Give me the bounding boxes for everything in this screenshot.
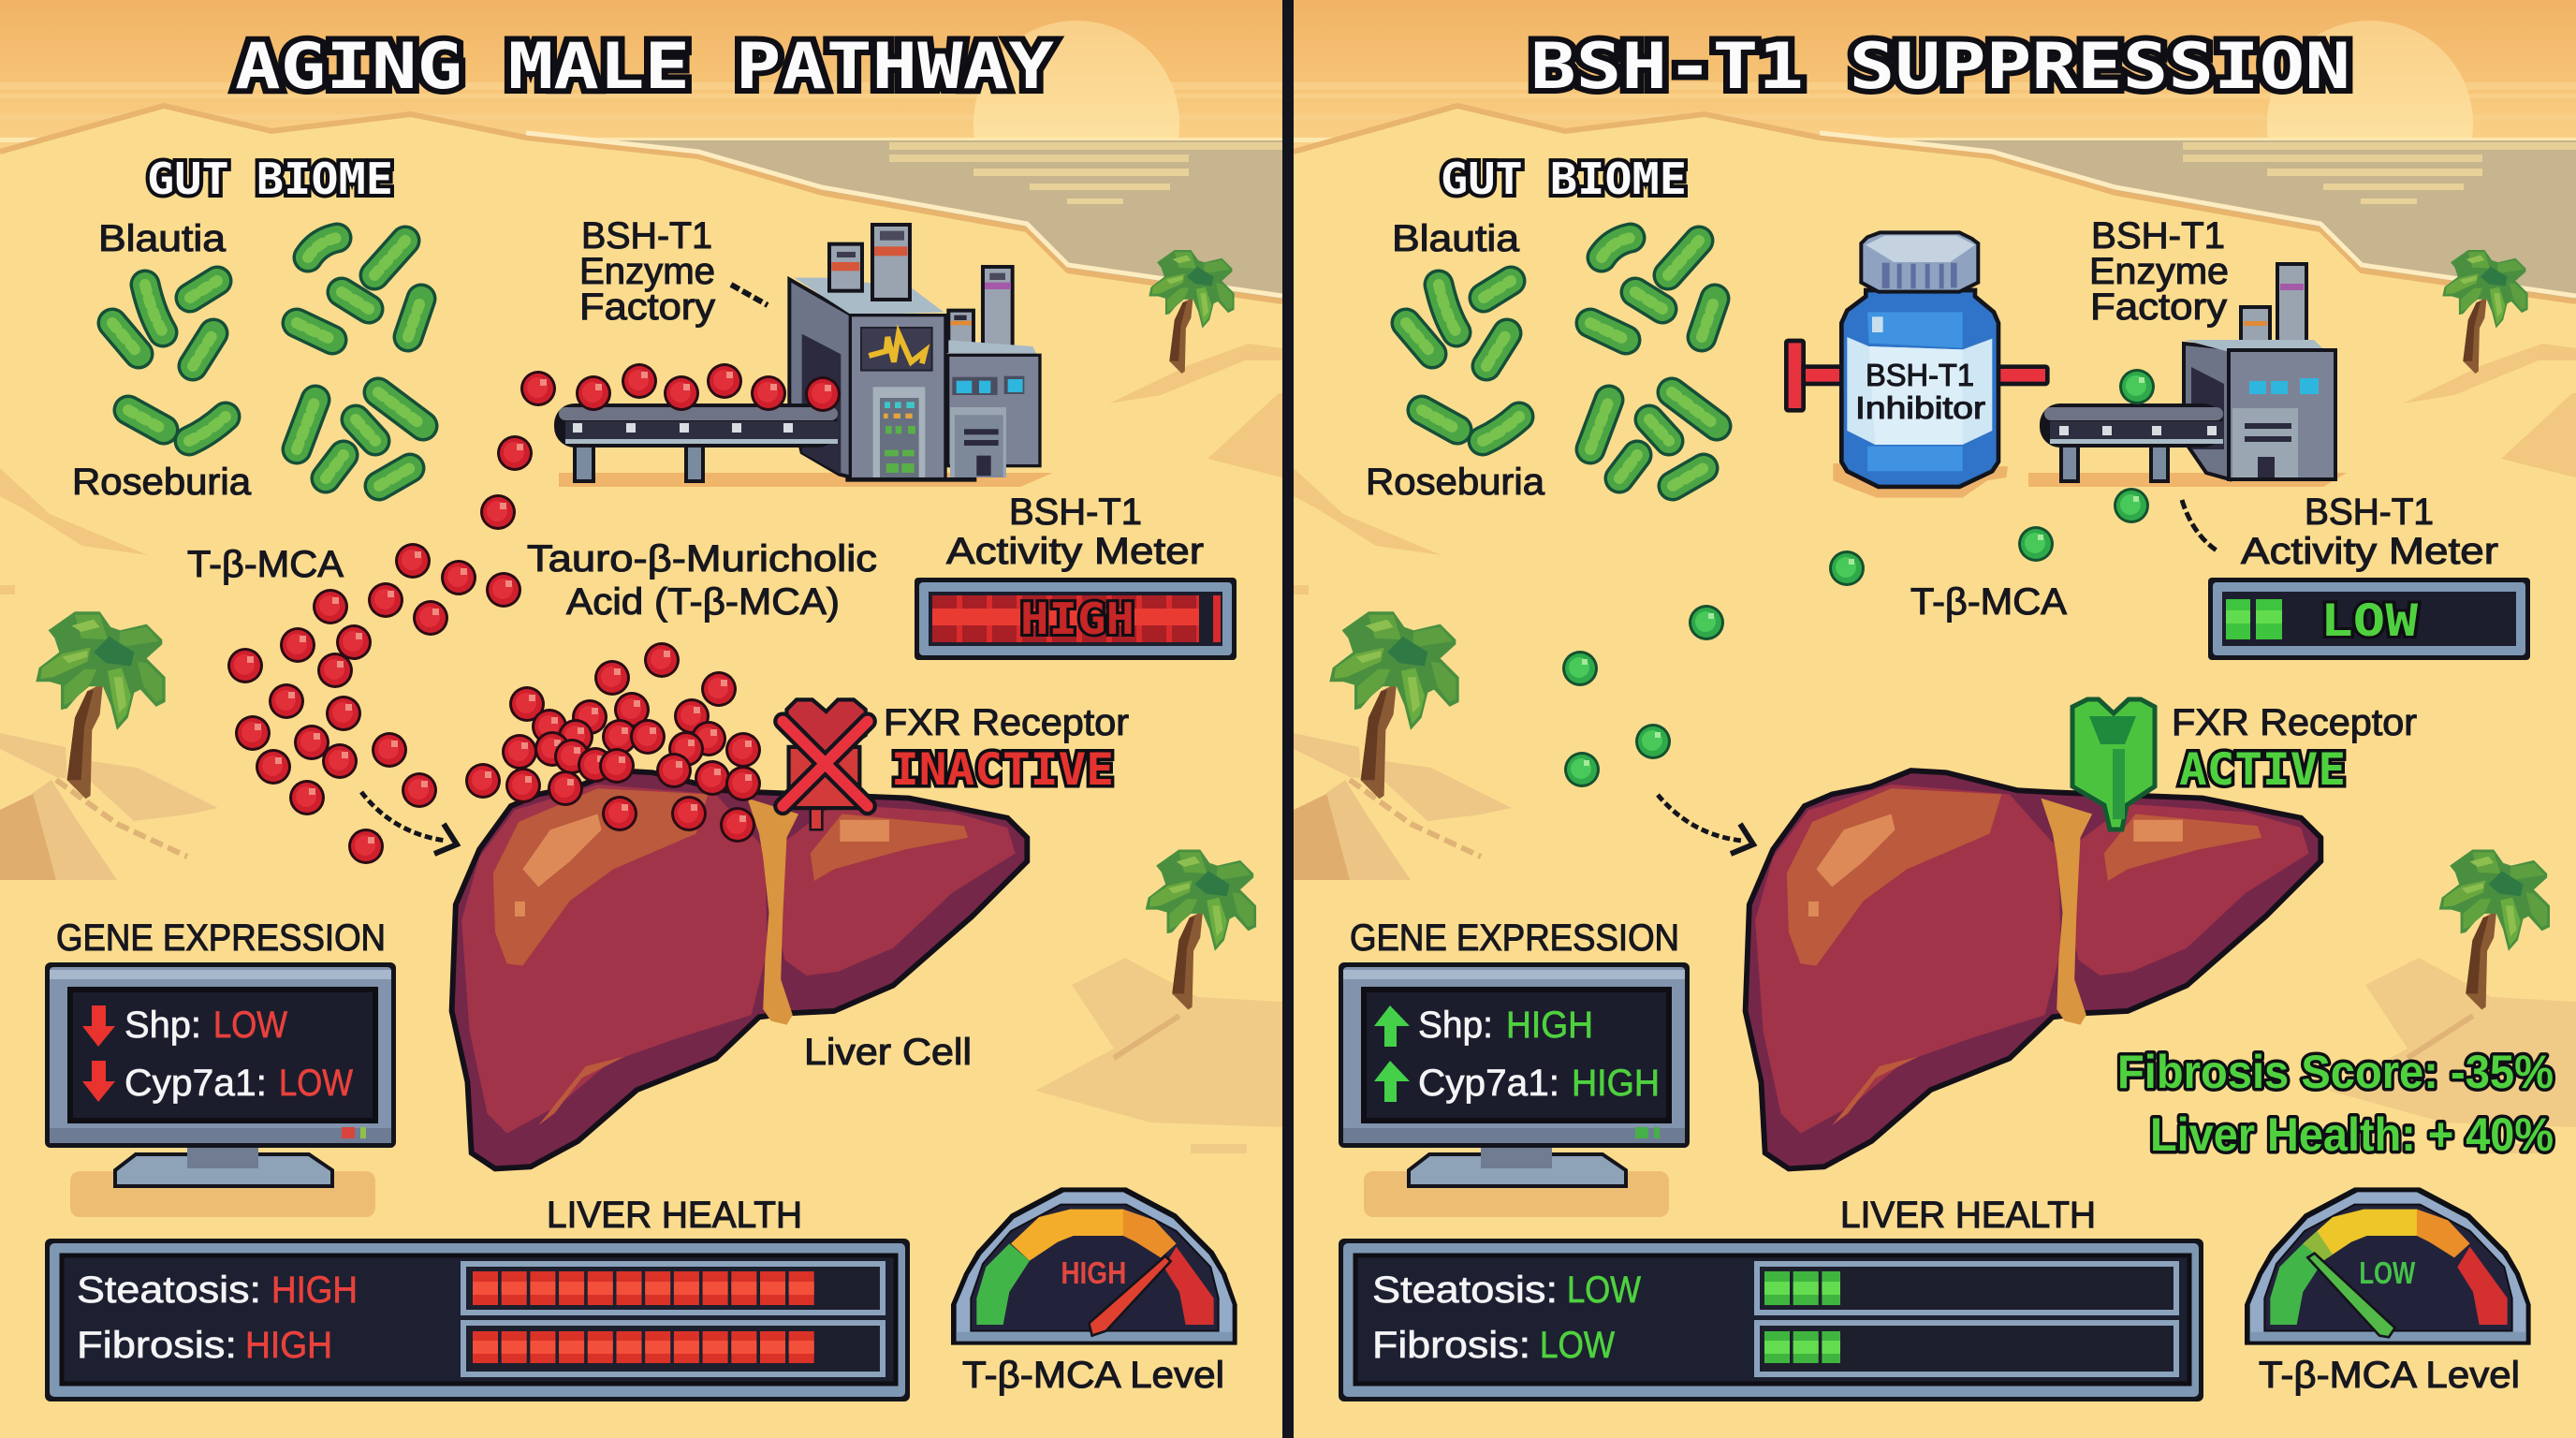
label: activity meter: BSH-T1 [2305, 492, 2434, 533]
panel: liver health bars low [1339, 1239, 2203, 1401]
monitor: gene expression low [45, 962, 396, 1217]
monitor: gene expression high: Shp: [1418, 1005, 1493, 1046]
panel: liver health bars low: Fibrosis: [1372, 1325, 1530, 1366]
label: activity meter: Activity Meter [946, 531, 1204, 572]
label: activity meter [946, 492, 1204, 572]
icon: gut bacteria [112, 238, 423, 486]
label: Tauro-beta-Muricholic Acid [527, 538, 877, 623]
panel: liver health bars low: Steatosis: [1372, 1269, 1558, 1311]
label: FXR receptor: FXR Receptor [2172, 702, 2417, 743]
label: BSH-T1 enzyme factory: Factory [2090, 286, 2227, 328]
panel: liver health bars high: Steatosis: [77, 1269, 261, 1311]
icon: inactive FXR receptor with red X [783, 699, 868, 829]
label: Roseburia: Roseburia [1366, 462, 1545, 503]
label: BSH-T1 enzyme factory [579, 215, 715, 328]
label: activity meter [2241, 492, 2498, 572]
meter: BSH-T1 activity high [915, 578, 1237, 660]
arrow: molecules to liver [361, 792, 457, 854]
monitor: gene expression low: LOW [279, 1063, 353, 1104]
panel: liver health bars low: LOW [1567, 1269, 1641, 1311]
callout: liver health: Liver Health: + 40% [2150, 1108, 2554, 1161]
icon: molecules crowding liver [465, 642, 761, 843]
illustration: liver [1746, 770, 2320, 1168]
panel: BSH-T1 suppression [1294, 0, 2576, 1438]
label: BSH-T1 enzyme factory [2089, 215, 2229, 328]
gauge: T-beta-MCA level high: HIGH [1061, 1256, 1126, 1291]
heading: liver health: LIVER HEALTH [1840, 1195, 2096, 1236]
icon: small enzyme factory [2028, 264, 2347, 487]
title: BSH-T1 suppression: BSH-T1 SUPPRESSION [1530, 30, 2350, 104]
monitor: gene expression high: HIGH [1572, 1063, 1660, 1104]
heading: gene expression: GENE EXPRESSION [56, 917, 386, 959]
status: active: ACTIVE [2179, 744, 2346, 796]
label: BSH-T1 enzyme factory: BSH-T1 [581, 215, 712, 257]
divider between panels [1282, 0, 1294, 1438]
meter: BSH-T1 activity low [2208, 578, 2530, 660]
monitor: gene expression low: LOW [213, 1005, 287, 1046]
label: gauge level: T-β-MCA Level [2259, 1355, 2520, 1396]
label: liver cell: Liver Cell [804, 1032, 972, 1073]
heading: gut biome: GUT BIOME [1441, 154, 1687, 204]
icon: BSH-T1 inhibitor bottle: BSH-T1 [1866, 358, 1974, 392]
icon: active FXR receptor [2072, 699, 2155, 829]
monitor: gene expression low: Cyp7a1: [124, 1063, 267, 1104]
icon: BSH-T1 inhibitor bottle [1786, 232, 2047, 498]
label: gauge level: T-β-MCA Level [962, 1355, 1224, 1396]
status: inactive: INACTIVE [891, 744, 1114, 796]
arrow: factory leader [731, 285, 768, 305]
icon: enzyme factory [554, 225, 1053, 487]
monitor: gene expression high: HIGH [1506, 1005, 1593, 1046]
heading: gene expression: GENE EXPRESSION [1350, 917, 1679, 959]
icon: T-beta-MCA molecules on conveyor [227, 363, 841, 864]
panel: liver health bars high: HIGH [245, 1325, 332, 1366]
heading: gut biome: GUT BIOME [147, 154, 393, 204]
icon: BSH-T1 inhibitor bottle: Inhibitor [1855, 390, 1985, 425]
label: FXR receptor: FXR Receptor [884, 702, 1129, 743]
panel: liver health bars high: Fibrosis: [77, 1325, 237, 1366]
arrow: meter leader [2182, 500, 2217, 550]
icon: gut bacteria [1406, 238, 1717, 486]
label: Blautia: Blautia [1392, 218, 1520, 259]
icon: down arrow [82, 1005, 115, 1047]
label: T-beta-MCA: T-β-MCA [1910, 581, 2067, 623]
monitor: gene expression high [1339, 962, 1690, 1217]
gauge: T-beta-MCA level low [2245, 1187, 2531, 1345]
label: T-beta-MCA: T-β-MCA [187, 544, 344, 585]
gauge: T-beta-MCA level high [951, 1187, 1237, 1345]
label: Tauro-beta-Muricholic Acid: Tauro-β-Muricholic [527, 538, 877, 580]
label: Blautia: Blautia [98, 218, 227, 259]
panel: aging male pathway [0, 0, 1282, 1438]
label: Tauro-beta-Muricholic Acid: Acid (T-β-MCA) [566, 581, 840, 623]
monitor: gene expression low: Shp: [124, 1005, 201, 1046]
heading: liver health: LIVER HEALTH [547, 1195, 802, 1236]
title: aging male pathway: AGING MALE PATHWAY [235, 30, 1054, 104]
panel: liver health bars high: HIGH [271, 1269, 358, 1311]
label: BSH-T1 enzyme factory: BSH-T1 [2091, 215, 2225, 257]
icon: T-beta-MCA molecules green [1562, 369, 2155, 787]
meter: BSH-T1 activity high: HIGH [1020, 594, 1134, 644]
label: BSH-T1 enzyme factory: Enzyme [2089, 251, 2229, 292]
monitor: gene expression high: Cyp7a1: [1418, 1063, 1559, 1104]
meter: BSH-T1 activity low: LOW [2320, 595, 2419, 647]
gauge: T-beta-MCA level low: LOW [2359, 1256, 2416, 1291]
panel: liver health bars low: LOW [1540, 1325, 1615, 1366]
arrow: molecules to liver [1658, 795, 1753, 854]
label: activity meter: BSH-T1 [1009, 492, 1142, 533]
icon: up arrow [1374, 1005, 1410, 1047]
illustration: liver [452, 770, 1027, 1168]
label: Roseburia: Roseburia [72, 462, 252, 503]
panel: liver health bars high [45, 1239, 910, 1401]
label: BSH-T1 enzyme factory: Enzyme [579, 251, 715, 292]
label: activity meter: Activity Meter [2241, 531, 2498, 572]
callout: fibrosis score: Fibrosis Score: -35% [2117, 1046, 2554, 1098]
label: BSH-T1 enzyme factory: Factory [579, 286, 715, 328]
